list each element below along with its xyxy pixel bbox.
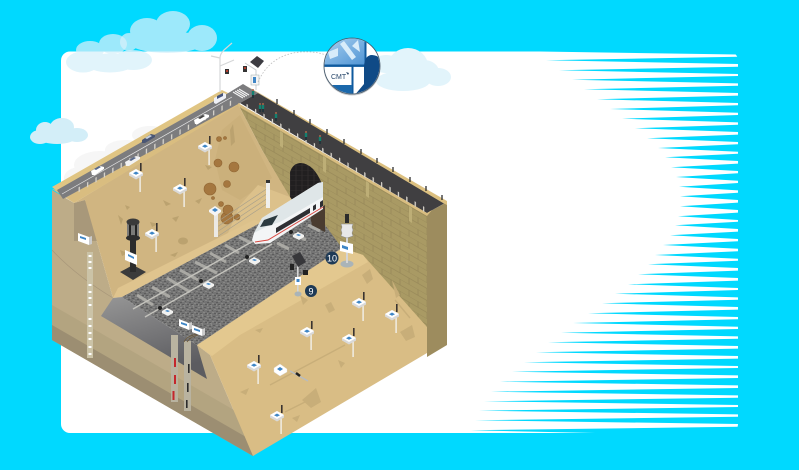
- right rim: [247, 86, 447, 205]
- crosswalk: [233, 89, 249, 98]
- traffic lights: [225, 66, 247, 74]
- wall pilasters: [280, 131, 412, 223]
- railway track: [133, 225, 320, 317]
- cloud: top large: [120, 11, 217, 53]
- street lamp: [211, 43, 234, 92]
- station 10 weather sensor: [340, 214, 354, 268]
- field sensors: [129, 136, 399, 434]
- white speed lines on right: [471, 50, 738, 434]
- right sand slope: [197, 248, 427, 456]
- fence: [209, 180, 270, 237]
- dashed link arc: [258, 52, 326, 82]
- cloud: left: [30, 118, 88, 144]
- ballast bed: [122, 205, 342, 345]
- marker 10: 10: [327, 254, 337, 264]
- pit under tunnel: [310, 205, 325, 232]
- tunnel: [290, 163, 322, 215]
- marker 9: [305, 285, 317, 297]
- brick wall: [238, 104, 427, 353]
- left road posts: [72, 96, 238, 196]
- train: [252, 182, 323, 244]
- isometric cutaway block: [52, 43, 447, 456]
- pedestrians: [252, 89, 321, 144]
- right road posts: [240, 100, 428, 214]
- faded clouds behind block: [64, 126, 168, 189]
- inclinometer column: [78, 233, 93, 358]
- cloud: behind callout: [372, 48, 451, 91]
- wall end cap: [427, 202, 447, 357]
- left road: [52, 84, 258, 203]
- borehole with dark probes: [184, 325, 205, 411]
- roadside solar station: [245, 56, 264, 90]
- weather station tower: [120, 218, 146, 280]
- rim bollards: [277, 99, 442, 200]
- cloud: top small: [66, 34, 152, 72]
- dark road: [240, 93, 445, 213]
- cars: [91, 93, 226, 175]
- marker 9: 9: [308, 286, 314, 296]
- station 9 solar sensor: [290, 252, 308, 296]
- left sand slope: [74, 104, 300, 298]
- borehole with red markers: [171, 319, 192, 402]
- circular callout: CMT: [331, 74, 347, 81]
- marker 10: [326, 252, 338, 264]
- circular callout: [324, 38, 381, 96]
- ground sensor with cable: [274, 364, 308, 381]
- track sensors: [158, 230, 304, 316]
- rocks: [204, 136, 240, 224]
- white panel: [61, 52, 738, 433]
- embankment gravel: [101, 297, 207, 379]
- left soil face: [52, 190, 253, 456]
